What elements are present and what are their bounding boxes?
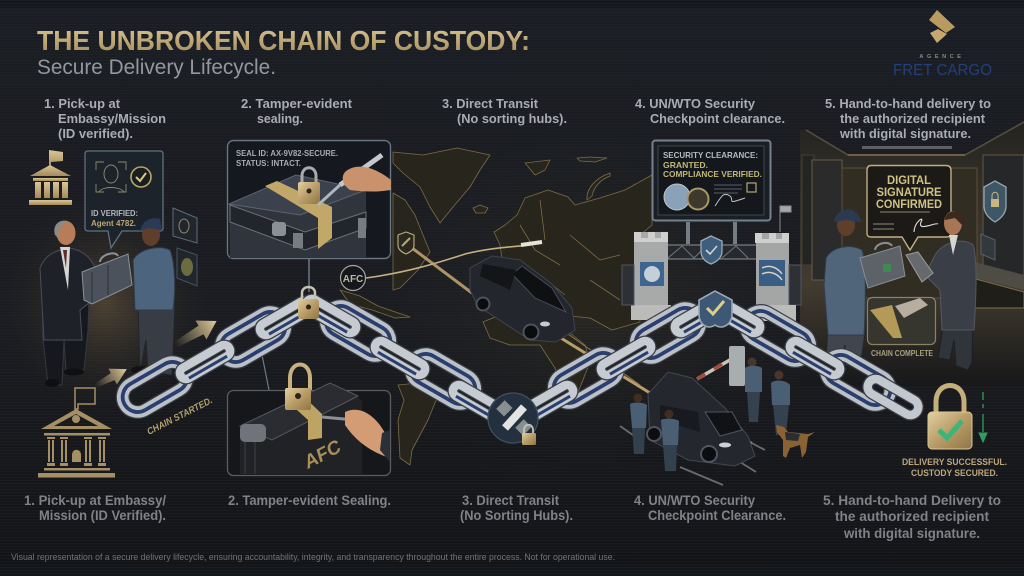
chain segment: start to seal — [117, 299, 312, 417]
caption: step 3 bottom — [460, 493, 573, 523]
caption: step 4 bottom: 4. UN/WTO Security — [634, 493, 755, 508]
gate shield — [701, 236, 722, 264]
icon: gold bank — [29, 150, 72, 205]
room: delivery office — [800, 122, 1024, 385]
logo: Agence Fret Cargo — [893, 10, 992, 79]
AFC badge — [340, 266, 366, 290]
officer — [630, 394, 647, 454]
shield on chain — [699, 291, 732, 327]
text: delivery successful: DELIVERY SUCCESSFUL. — [902, 457, 1007, 468]
arrow: progress lower — [91, 361, 131, 394]
callout: digital signature — [867, 166, 951, 250]
UN seal — [664, 184, 690, 210]
caption: step 3 bottom: 3. Direct Transit — [462, 493, 559, 508]
panel: chain complete — [868, 298, 936, 358]
subtitle: Secure Delivery Lifecycle. — [37, 56, 276, 79]
right tower — [755, 233, 801, 321]
padlock — [285, 364, 311, 410]
world map — [340, 148, 652, 465]
shield marker on map — [398, 232, 414, 254]
route line — [366, 242, 650, 393]
icon: bank outline — [38, 388, 115, 478]
title: THE UNBROKEN CHAIN OF CUSTODY: — [37, 25, 530, 56]
heading: step 4 top — [635, 96, 785, 126]
heading: step 5 top: the authorized recipient — [840, 111, 986, 126]
van at checkpoint — [647, 372, 755, 466]
heading: step 2 top: sealing. — [257, 111, 303, 126]
heading: step 5 top: with digital signature. — [839, 126, 971, 141]
panel: seal close-up: STATUS: INTACT. — [236, 159, 301, 168]
panel: chain complete: CHAIN COMPLETE — [871, 349, 934, 358]
heading: step 1 top — [44, 96, 166, 141]
monitor and desk — [972, 234, 1024, 308]
heading: step 5 top: 5. Hand-to-hand delivery to — [825, 96, 991, 111]
heading: step 3 top — [442, 96, 567, 126]
icon: face scan — [96, 162, 126, 192]
chain segment: checkpoint to delivery — [708, 297, 921, 418]
heading: step 4 top: Checkpoint clearance. — [650, 111, 785, 126]
briefcase — [229, 175, 366, 258]
panel: bottom seal — [228, 355, 390, 476]
text: delivery successful — [902, 457, 1007, 479]
chain segment: seal to transit — [304, 297, 505, 421]
hand with pen — [318, 155, 391, 205]
logo: Agence Fret Cargo: FRET CARGO — [893, 62, 992, 79]
caption: step 4 bottom: Checkpoint Clearance. — [648, 508, 786, 523]
heading: step 1 top: Embassy/Mission — [58, 111, 166, 126]
icon: gold padlock with check — [928, 386, 987, 449]
callout: ID verified: Agent 4782. — [91, 219, 136, 228]
padlock — [298, 168, 320, 204]
diplomat handing case — [40, 221, 98, 387]
icon: plane — [521, 242, 542, 245]
callout: ID verified: ID VERIFIED: — [91, 209, 138, 218]
AFC mark: AFC — [300, 436, 345, 474]
briefcase handover — [82, 253, 132, 304]
heading: step 4 top: 4. UN/WTO Security — [635, 96, 756, 111]
heading: step 1 top: (ID verified). — [58, 126, 133, 141]
officer delivering case — [824, 210, 866, 368]
officer — [661, 410, 679, 471]
heading: step 1 top: 1. Pick-up at — [44, 96, 121, 111]
officer — [745, 358, 762, 422]
recipient with tablet — [906, 211, 976, 370]
heading: step 3 top: 3. Direct Transit — [442, 96, 539, 111]
biometric cards — [173, 208, 197, 286]
padlock — [522, 425, 536, 445]
barrier — [697, 346, 745, 386]
caption: step 5 bottom — [823, 493, 1001, 541]
left tower — [622, 232, 671, 320]
callout: digital signature: CONFIRMED — [876, 197, 942, 211]
caption: step 1 bottom: 1. Pick-up at Embassy/ — [24, 493, 166, 508]
icon: road markings — [620, 426, 765, 485]
camera — [780, 206, 791, 232]
case at delivery — [860, 243, 905, 288]
caption: step 5 bottom: the authorized recipient — [835, 509, 989, 524]
checkpoint gate — [622, 206, 801, 321]
officer receiving case — [131, 218, 175, 375]
caption: step 1 bottom: Mission (ID Verified). — [39, 508, 166, 523]
green arrows — [979, 392, 987, 442]
caption: step 4 bottom — [634, 493, 786, 523]
AFC badge: AFC — [343, 274, 363, 285]
padlock on chain — [298, 287, 319, 319]
tamper band — [286, 395, 322, 440]
briefcase — [240, 383, 362, 474]
panel: seal close-up: SEAL ID: AX-9V82-SECURE. — [236, 149, 338, 158]
caption: step 2 bottom: 2. Tamper-evident Sealing. — [228, 493, 391, 508]
connector: seal panel to chain — [308, 259, 310, 292]
panel: security clearance: SECURITY CLEARANCE: — [663, 150, 758, 160]
heading: step 5 top — [825, 96, 991, 141]
text: delivery successful: CUSTODY SECURED. — [911, 468, 998, 479]
heading: step 3 top: (No sorting hubs). — [457, 111, 567, 126]
callout: digital signature: SIGNATURE — [876, 185, 942, 199]
chain — [117, 297, 921, 421]
icon: check — [131, 167, 151, 187]
heading: step 2 top: 2. Tamper-evident — [241, 96, 353, 111]
tamper band — [265, 181, 332, 249]
callout: digital signature: DIGITAL — [887, 173, 931, 187]
officer — [771, 370, 790, 435]
satellite medallion — [488, 393, 538, 445]
logo: Agence Fret Cargo: AGENCE — [919, 54, 965, 60]
chain started label: CHAIN STARTED. — [145, 395, 215, 438]
arrow: progress upper — [170, 311, 222, 355]
chain segment: transit to checkpoint — [521, 297, 727, 421]
caption: step 5 bottom: 5. Hand-to-hand Delivery to — [823, 493, 1001, 508]
gold seal — [688, 188, 708, 210]
panel: security clearance: GRANTED. — [663, 160, 708, 170]
officers at gate — [630, 358, 790, 471]
panel: security clearance — [652, 140, 770, 220]
wall shield with lock — [984, 181, 1006, 222]
hand with pen — [322, 410, 390, 462]
caption: step 3 bottom: (No Sorting Hubs). — [460, 508, 573, 523]
panel: seal close-up — [228, 140, 391, 258]
callout: ID verified — [85, 151, 163, 248]
caption: step 5 bottom: with digital signature. — [843, 526, 980, 541]
panel: security clearance: COMPLIANCE VERIFIED. — [663, 169, 762, 179]
van on route — [470, 256, 575, 342]
footer disclaimer: Visual representation of a secure delivery lifecycle, ensuring accountability, integrity, and transparency throughout the entire process. Not for operational use. — [11, 552, 615, 563]
caption: step 1 bottom — [24, 493, 166, 523]
heading: step 2 top — [241, 96, 353, 126]
icon: dog — [776, 425, 815, 458]
